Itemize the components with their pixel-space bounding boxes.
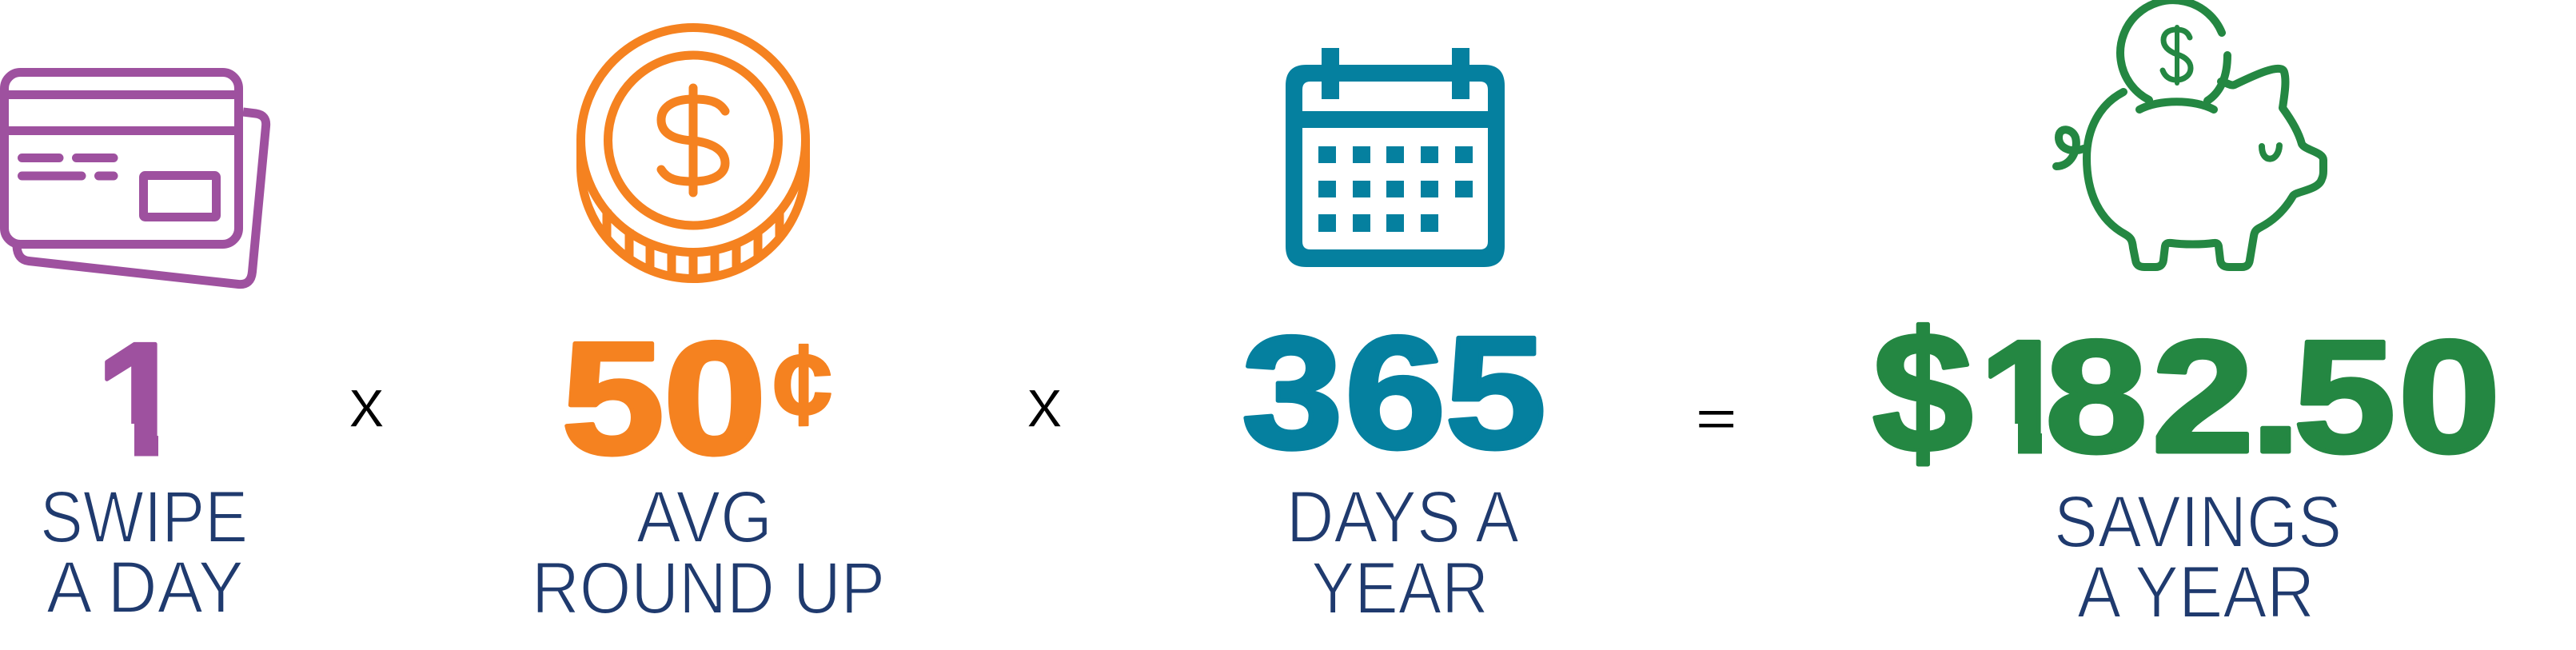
number: 50 cents: ¢: [772, 320, 833, 449]
label: savings a year: A YEAR: [2077, 552, 2315, 633]
number: total: [1872, 321, 2495, 467]
label: savings a year: [2054, 481, 2342, 633]
operator: times: x: [1027, 363, 1063, 442]
number: total: $: [1872, 296, 1973, 488]
label: days a year: [1286, 477, 1520, 629]
icon: calendar: [1286, 48, 1505, 267]
operator: times: x: [349, 363, 385, 442]
label: days a year: DAYS A: [1286, 477, 1520, 558]
icon: credit cards: [0, 72, 266, 285]
number: total: 1: [1980, 308, 2068, 486]
number: total: 82.50: [2045, 307, 2501, 486]
label: swipe a day: [40, 477, 248, 628]
number: 50 cents: 50: [561, 309, 767, 487]
label: savings a year: SAVINGS: [2054, 481, 2342, 563]
icon: coin: [580, 27, 806, 279]
icon: piggy bank: [2056, 0, 2323, 267]
number: 365: 365: [1242, 304, 1546, 482]
number: 1: 1: [96, 310, 185, 488]
operator: equals: =: [1696, 391, 1737, 447]
label: avg round up: [532, 477, 885, 629]
label: swipe a day: SWIPE: [40, 477, 248, 558]
label: days a year: YEAR: [1311, 548, 1489, 629]
label: avg round up: AVG: [636, 477, 772, 558]
label: swipe a day: A DAY: [46, 547, 244, 628]
label: avg round up: ROUND UP: [532, 548, 885, 629]
